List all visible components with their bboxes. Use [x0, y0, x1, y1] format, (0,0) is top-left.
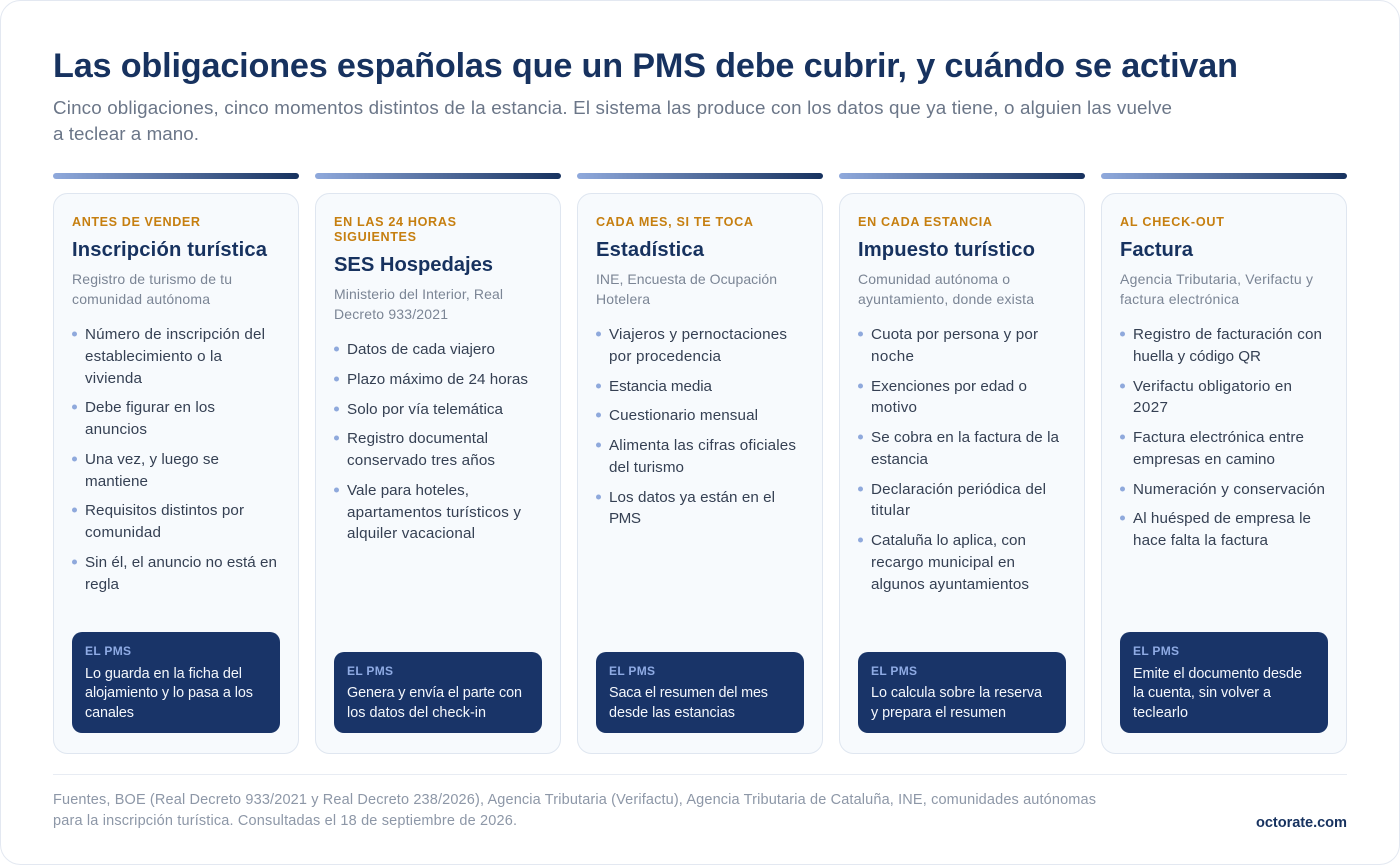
callout: el PMS: Lo calcula sobre la reserva	[871, 685, 1042, 701]
callout: el PMS: canales	[85, 705, 134, 721]
callout: el PMS: alojamiento y lo pasa a los	[85, 685, 253, 701]
panel: Impuesto turístico	[839, 173, 1085, 754]
bullet list: Vale para hoteles,	[347, 482, 469, 499]
subtitle: a teclear a mano.	[53, 123, 199, 144]
bullet list	[334, 341, 528, 542]
callout: el PMS: EL PMS	[609, 664, 655, 678]
bullet list: algunos ayuntamientos	[871, 576, 1029, 593]
panel: inscripción turística	[53, 173, 299, 754]
authority: ayuntamiento, donde exista	[858, 291, 1034, 307]
callout: el PMS	[1120, 632, 1328, 733]
bullet list: Verifactu obligatorio en	[1133, 378, 1292, 395]
card heading: Factura	[1120, 239, 1194, 261]
bullet list: comunidad	[85, 524, 161, 541]
bullet list: Numeración y conservación	[1133, 481, 1325, 498]
bullet list: Al huésped de empresa le	[1133, 510, 1311, 527]
authority	[858, 271, 1034, 307]
bullet list: hace falta la factura	[1133, 532, 1269, 549]
title: Las obligaciones españolas que un PMS debe cubrir, y cuándo se activan	[53, 47, 1238, 85]
callout: el PMS: teclearlo	[1133, 705, 1188, 721]
timing label: SIGUIENTES	[334, 230, 416, 244]
bullet list: Exenciones por edad o	[871, 378, 1027, 395]
bullet list: anuncios	[85, 421, 147, 438]
bullet list: recargo municipal en	[871, 554, 1015, 571]
bullet list: Debe figurar en los	[85, 399, 215, 416]
brand url: octorate.com	[1256, 815, 1347, 831]
bullet list: Solo por vía telemática	[347, 401, 504, 418]
bullet list: Sin él, el anuncio no está en	[85, 554, 277, 571]
bullet list: 2027	[1133, 399, 1168, 416]
bullet list	[1120, 326, 1325, 549]
panel: Estadística	[577, 173, 823, 754]
callout: el PMS: la cuenta, sin volver a	[1133, 685, 1271, 701]
timing label: EN CADA ESTANCIA	[858, 215, 992, 229]
bullet list: Número de inscripción del	[85, 326, 265, 343]
bullet list	[72, 326, 277, 593]
card heading: Impuesto turístico	[858, 239, 1035, 261]
callout: el PMS	[72, 632, 280, 733]
bullet list: titular	[871, 502, 910, 519]
authority	[334, 286, 503, 322]
authority: Agencia Tributaria, Verifactu y	[1120, 271, 1313, 287]
bullet list: Factura electrónica entre	[1133, 429, 1304, 446]
timing label: EN LAS 24 HORAS	[334, 215, 456, 229]
authority: Registro de turismo de tu	[72, 271, 232, 287]
timing label: AL CHECK-OUT	[1120, 215, 1224, 229]
bullet list: empresas en camino	[1133, 451, 1275, 468]
timing label	[334, 215, 456, 244]
callout: el PMS: EL PMS	[1133, 644, 1179, 658]
card heading: Inscripción turística	[72, 239, 268, 261]
callout: el PMS: EL PMS	[85, 644, 131, 658]
bullet list: Una vez, y luego se	[85, 451, 219, 468]
bullet list: PMS	[609, 510, 641, 527]
bullet list: alquiler vacacional	[347, 525, 475, 542]
bullet list: del turismo	[609, 459, 684, 476]
bullet list: motivo	[871, 399, 917, 416]
bullet list: vivienda	[85, 370, 143, 387]
timing label: CADA MES, SI TE TOCA	[596, 215, 753, 229]
bullet list: Cuota por persona y por	[871, 326, 1038, 343]
bullet list: Alimenta las cifras oficiales	[609, 437, 796, 454]
bullet list: huella y código QR	[1133, 348, 1261, 365]
authority: comunidad autónoma	[72, 291, 210, 307]
bullet list: por procedencia	[609, 348, 722, 365]
callout: el PMS: EL PMS	[347, 664, 393, 678]
timing label: ANTES DE VENDER	[72, 215, 200, 229]
bullet list: apartamentos turísticos y	[347, 504, 521, 521]
bullet list: Registro de facturación con	[1133, 326, 1322, 343]
callout: el PMS: Emite el documento desde	[1133, 666, 1302, 682]
bullet list: regla	[85, 576, 120, 593]
bullet list: Cuestionario mensual	[609, 407, 758, 424]
bullet list: Los datos ya están en el	[609, 489, 775, 506]
bullet list	[858, 326, 1060, 593]
bullet list: Estancia media	[609, 378, 713, 395]
authority	[72, 271, 232, 307]
authority	[596, 271, 777, 307]
bullet list: Cataluña lo aplica, con	[871, 532, 1026, 549]
callout: el PMS	[858, 652, 1066, 733]
bullet list: conservado tres años	[347, 452, 495, 469]
sources footnote: para la inscripción turística. Consultadas el 18 de septiembre de 2026.	[53, 813, 517, 829]
authority: factura electrónica	[1120, 291, 1239, 307]
bullet list: Registro documental	[347, 430, 488, 447]
callout: el PMS	[334, 652, 542, 733]
callout: el PMS: EL PMS	[871, 664, 917, 678]
bullet list: Plazo máximo de 24 horas	[347, 371, 528, 388]
bullet list: Viajeros y pernoctaciones	[609, 326, 787, 343]
callout: el PMS: los datos del check-in	[347, 705, 486, 721]
subtitle: Cinco obligaciones, cinco momentos distintos de la estancia. El sistema las produce con los datos que ya tiene, o alguien las vuelve	[53, 97, 1172, 118]
sources footnote	[53, 792, 1096, 829]
authority	[1120, 271, 1313, 307]
authority: Ministerio del Interior, Real	[334, 286, 503, 302]
callout: el PMS: desde las estancias	[609, 705, 735, 721]
authority: Comunidad autónoma o	[858, 271, 1010, 287]
callout: el PMS: Lo guarda en la ficha del	[85, 666, 242, 682]
card heading: SES Hospedajes	[334, 254, 493, 276]
bullet list: Se cobra en la factura de la	[871, 429, 1060, 446]
bullet list: Requisitos distintos por	[85, 502, 244, 519]
panel: Factura	[1101, 173, 1347, 754]
callout: el PMS: Saca el resumen del mes	[609, 685, 768, 701]
bullet list: noche	[871, 348, 914, 365]
bullet list: Declaración periódica del	[871, 481, 1046, 498]
card heading: Estadística	[596, 239, 705, 261]
sources footnote: Fuentes, BOE (Real Decreto 933/2021 y Real Decreto 238/2026), Agencia Tributaria (Verifactu), Agencia Tributaria de Cataluña, INE, comunidades autónomas	[53, 792, 1096, 808]
callout: el PMS: y prepara el resumen	[871, 705, 1006, 721]
bullet list: estancia	[871, 451, 929, 468]
bullet list: establecimiento o la	[85, 348, 223, 365]
authority: Hotelera	[596, 291, 650, 307]
panel: SES Hospedajes	[315, 173, 561, 754]
subtitle	[53, 97, 1172, 144]
callout: el PMS	[596, 652, 804, 733]
bullet list: mantiene	[85, 473, 148, 490]
authority: Decreto 933/2021	[334, 306, 448, 322]
authority: INE, Encuesta de Ocupación	[596, 271, 777, 287]
callout: el PMS: Genera y envía el parte con	[347, 685, 522, 701]
bullet list	[596, 326, 796, 527]
bullet list: Datos de cada viajero	[347, 341, 495, 358]
